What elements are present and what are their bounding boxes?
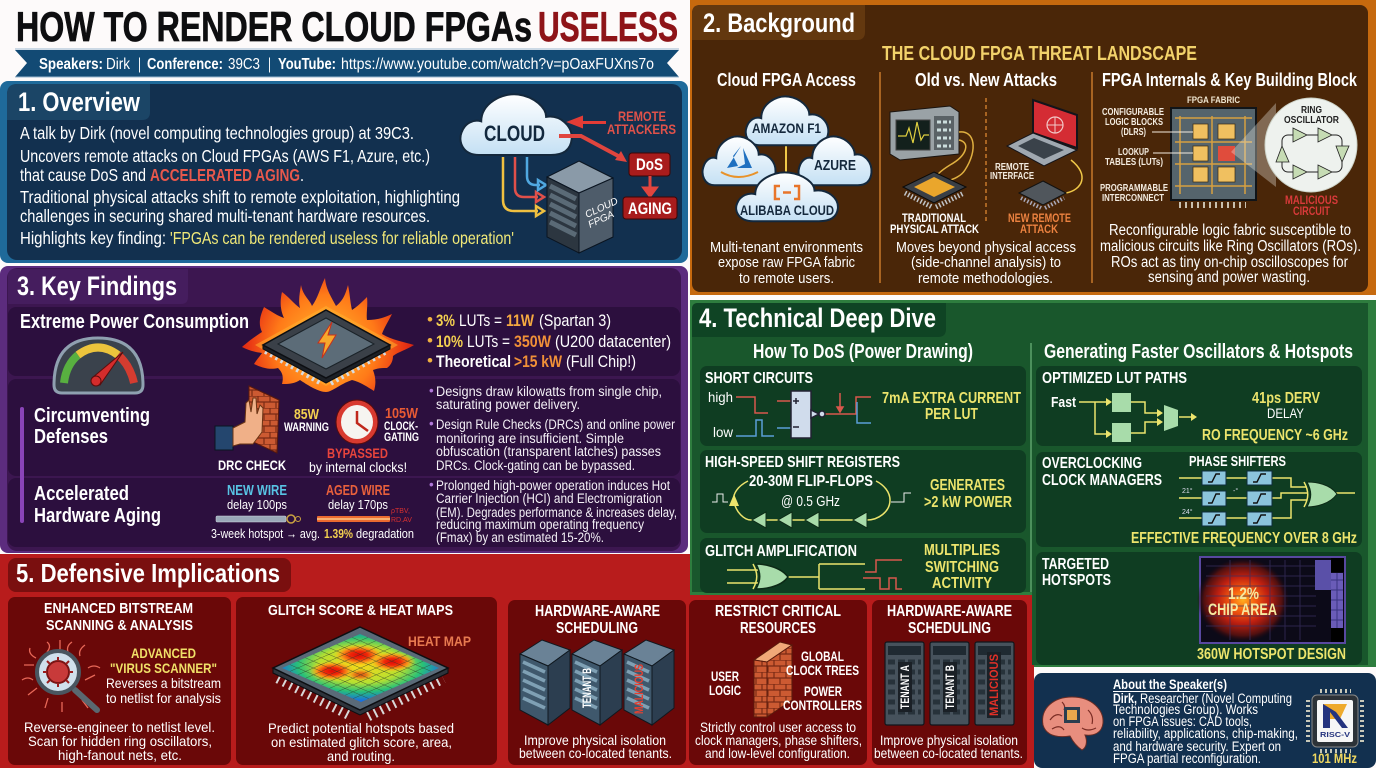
remote attackers label: ATTACKERS	[607, 121, 676, 137]
arrow head: DoS	[615, 151, 627, 162]
diagram: fpga fabric: FPGA FABRIC	[1187, 95, 1240, 106]
label: bypassed	[309, 445, 407, 475]
degradation note: 3-week hotspot → avg.	[211, 526, 320, 541]
degradation note	[211, 526, 414, 541]
card heading: HARDWARE-AWARE	[887, 603, 1012, 620]
callout: generates power: GENERATES	[930, 477, 1005, 494]
cloud: azure logo	[703, 136, 776, 185]
cloud: amazon f1: AMAZON F1	[752, 120, 821, 136]
speaker ribbon: |	[138, 56, 141, 73]
bullets: power stats: 11W	[506, 311, 535, 330]
cloud: alibaba: ALIBABA CLOUD	[740, 202, 834, 218]
labels: fabric parts: INTERCONNECT	[1102, 193, 1164, 204]
ring oscillator circle: RING	[1301, 105, 1322, 116]
card text: Reverse-engineer to netlist level.	[24, 719, 215, 735]
card heading	[44, 600, 193, 634]
text: old vs new	[896, 239, 1076, 287]
speaker bio	[1113, 676, 1298, 766]
label: protected resources: CONTROLLERS	[783, 697, 862, 713]
card heading: SCANNING & ANALYSIS	[46, 617, 193, 634]
heading: key findings: 3. Key Findings	[17, 271, 177, 301]
overview text: ACCELERATED AGING	[150, 165, 300, 185]
bullets: defenses: monitoring are insufficient. Simple	[436, 431, 624, 446]
icon: risc-v chip	[1308, 691, 1362, 751]
callout: extra current: 7mA EXTRA CURRENT	[882, 390, 1021, 407]
card heading: SCHEDULING	[908, 620, 991, 637]
heading: defensive implications: 5. Defensive Implications	[16, 558, 280, 588]
cloud: amazon f1	[746, 96, 828, 145]
ring oscillator circle: OSCILLATOR	[1284, 115, 1340, 126]
label: DRC check: DRC CHECK	[218, 457, 286, 473]
label: 105W clock-gating: GATING	[384, 430, 419, 444]
icon: racks: TENANT A	[898, 665, 912, 709]
card text	[24, 719, 215, 763]
speaker ribbon: Conference:	[147, 56, 223, 73]
panel: 3. key findings	[0, 266, 688, 553]
panel: about the speaker	[1034, 673, 1376, 768]
text: cloud fpga access: Multi-tenant environments	[710, 239, 863, 256]
label: protected resources: POWER	[804, 683, 842, 699]
label: remote interface: REMOTE	[995, 162, 1029, 173]
text: old vs new: (side-channel analysis) to	[911, 254, 1061, 271]
heading: background: 2. Background	[703, 8, 855, 38]
aged wire: ρTBV,	[391, 508, 410, 515]
speaker ribbon: Dirk	[106, 56, 131, 73]
input labels: high	[708, 389, 733, 405]
heading: overview	[7, 84, 150, 120]
speaker bio: reliability, applications, chip-making,	[1113, 726, 1298, 741]
label: user logic	[709, 668, 741, 698]
text: fpga internals: sensing and power wasting.	[1148, 269, 1310, 286]
callout: switching activity	[924, 542, 1000, 592]
bullets: power stats: Theoretical	[436, 352, 511, 371]
card: short circuits	[700, 366, 1026, 446]
speaker bio: Dirk,	[1113, 691, 1137, 706]
card text: between co-located tenants.	[874, 745, 1023, 761]
diagram: phase shifters: 24°	[1182, 508, 1193, 516]
speaker ribbon: https://www.youtube.com/watch?v=pOaxFUXns7o	[341, 56, 654, 73]
card heading	[1042, 556, 1111, 589]
bullets: defenses: obfuscation (transparent latches) passes	[436, 444, 661, 459]
callout: generates power: >2 kW POWER	[924, 494, 1012, 511]
icon: server group: TENANT B	[580, 668, 594, 708]
bullets: power stats: •	[427, 310, 433, 329]
subheading: circumventing defenses	[34, 405, 150, 448]
diagram: phase shifters: -°	[1233, 487, 1238, 495]
speaker ribbon: 39C3	[228, 56, 260, 73]
card: glitch amplification	[700, 538, 1026, 593]
diagram: cloud attacks	[460, 94, 677, 253]
arrow: remote link	[1066, 160, 1082, 193]
card: hardware-aware scheduling (right)	[872, 600, 1027, 765]
speaker ribbon: |	[268, 56, 271, 73]
icon: server group	[520, 640, 674, 725]
text: advanced virus scanner: ADVANCED	[131, 645, 196, 661]
card text: high-fanout nets, etc.	[58, 747, 182, 763]
diagram: phase shifters: 21°	[1182, 487, 1193, 495]
input labels: low	[713, 424, 734, 440]
bullets: aging: •	[429, 477, 434, 492]
card: shift registers: HIGH-SPEED SHIFT REGISTERS	[705, 454, 900, 471]
speaker bio: Technologies Group). Works	[1113, 702, 1258, 717]
bullets: aging: (Fmax) by an estimated 15-20%.	[436, 530, 604, 545]
label: clock speed: 101 MHz	[1312, 750, 1357, 766]
cloud: azure	[799, 136, 872, 185]
title: USELESS	[538, 3, 678, 50]
arrow: blue	[527, 157, 546, 190]
card heading: RESTRICT CRITICAL	[715, 603, 841, 620]
icon: gauge	[54, 338, 143, 393]
text: cloud fpga access: to remote users.	[739, 270, 834, 287]
card: hardware-aware scheduling (left)	[508, 600, 686, 765]
column headings	[753, 341, 1353, 363]
subheading: hardware aging: Hardware Aging	[34, 505, 161, 527]
diagram: flip-flop loop	[712, 481, 911, 528]
aged wire: AGED WIRE	[326, 482, 390, 499]
bullets: aging: Prolonged high-power operation induces Hot	[436, 478, 670, 493]
card heading: GLITCH SCORE & HEAT MAPS	[268, 602, 453, 619]
labels: fabric parts	[1100, 107, 1193, 204]
icon: magnifier virus	[22, 640, 100, 712]
overview text: that cause DoS and	[20, 165, 146, 185]
labels: fabric parts: TABLES (LUTs)	[1105, 157, 1163, 168]
label: protected resources: GLOBAL	[801, 648, 844, 664]
card: optimized lut paths: OPTIMIZED LUT PATHS	[1042, 370, 1187, 387]
degradation note: degradation	[356, 526, 414, 541]
speaker bio: FPGA partial reconfiguration.	[1113, 751, 1261, 766]
panel: 2. background	[690, 0, 1376, 295]
label: traditional physical attack	[890, 211, 979, 236]
threat landscape title: THE CLOUD FPGA THREAT LANDSCAPE	[882, 43, 1197, 65]
flip-flop labels: @ 0.5 GHz	[781, 493, 840, 510]
ring oscillator circle	[1265, 98, 1357, 192]
card: targeted hotspots	[1036, 552, 1362, 665]
bullets: power stats: (U200 datacenter)	[555, 332, 671, 351]
card heading: HOTSPOTS	[1042, 572, 1111, 589]
label: new remote attack: NEW REMOTE	[1008, 211, 1071, 225]
card text	[695, 719, 862, 761]
card heading: SCHEDULING	[556, 620, 638, 637]
label: 85W warning: 85W	[294, 406, 320, 423]
label: heat map: HEAT MAP	[408, 633, 471, 649]
column headings	[717, 70, 1358, 90]
label: 105W clock-gating: 105W	[385, 405, 419, 422]
subheading: hardware aging	[34, 483, 161, 527]
chip heat map	[1197, 557, 1345, 643]
bullets: power stats: >15 kW	[514, 352, 563, 371]
speaker bio: Researcher (Novel Computing	[1140, 691, 1292, 706]
aged wire: delay 170ps	[328, 497, 388, 512]
labels: fabric parts: LOGIC BLOCKS	[1105, 117, 1163, 128]
callout: ro frequency	[1202, 390, 1348, 444]
new wire: NEW WIRE	[227, 482, 287, 499]
icon: laptop	[1007, 100, 1077, 166]
overview text: challenges in securing shared multi-tenant hardware resources.	[20, 206, 430, 226]
card: restrict resources	[689, 600, 867, 765]
card text: Strictly control user access to	[700, 719, 856, 735]
label: traditional physical attack: PHYSICAL ATTACK	[890, 222, 979, 236]
column headings: How To DoS (Power Drawing)	[753, 341, 973, 363]
flip-flop labels: 20-30M FLIP-FLOPS	[749, 473, 873, 490]
bullets: aging: Carrier Injection (HCI) and Electromigration	[436, 491, 662, 506]
label: 105W clock-gating: CLOCK-	[384, 419, 418, 433]
subheading: extreme power: Extreme Power Consumption	[20, 311, 249, 333]
overview text: .	[300, 165, 304, 185]
callout: switching activity: MULTIPLIES	[924, 542, 1000, 559]
card text	[519, 732, 672, 761]
hotspot label	[1208, 584, 1277, 619]
label: traditional physical attack: TRADITIONAL	[902, 211, 966, 225]
hotspot label: CHIP AREA	[1208, 600, 1277, 619]
diagram: phase shifters	[1179, 471, 1355, 526]
icon: cloud: CLOUD	[484, 121, 545, 146]
label: malicious circuit	[1285, 193, 1338, 218]
icon: probed chip	[903, 172, 966, 207]
bullets: power stats: 350W	[514, 332, 552, 351]
card text: Improve physical isolation	[524, 732, 666, 748]
card text	[874, 732, 1023, 761]
label: new remote attack	[1008, 211, 1071, 236]
labels: fabric parts: (DLRS)	[1121, 127, 1146, 138]
icon: remote chip	[1019, 181, 1066, 208]
card: overclocking	[1036, 452, 1362, 547]
icon: cloud fpga server: CLOUD	[584, 196, 620, 221]
bullets: aging: (EM). Degrades performance & increases delay,	[436, 505, 677, 520]
arrow: cloud to DoS	[559, 136, 622, 158]
speaker bio: and hardware security. Expert on	[1113, 739, 1281, 754]
card: optimized lut paths	[1036, 366, 1362, 446]
arrow: attackers to cloud	[569, 117, 605, 127]
card: glitch amplification: GLITCH AMPLIFICATION	[705, 543, 857, 560]
overview text: Uncovers remote attacks on Cloud FPGAs (AWS F1, Azure, etc.)	[20, 146, 430, 166]
bullets: defenses: Design Rule Checks (DRCs) and online power	[436, 417, 675, 432]
bullets: power stats: LUTs =	[459, 311, 502, 330]
card heading: ENHANCED BITSTREAM	[44, 600, 193, 617]
overview text: Traditional physical attacks shift to remote exploitation, highlighting	[20, 187, 460, 207]
bullets: power stats	[427, 310, 671, 371]
DoS box	[629, 153, 670, 176]
text: advanced virus scanner: "VIRUS SCANNER"	[110, 660, 217, 676]
labels: fabric parts: PROGRAMMABLE	[1100, 183, 1168, 194]
card heading	[535, 603, 660, 637]
panel: 4. technical deep dive	[690, 300, 1376, 667]
icon: cloud	[460, 94, 572, 155]
DoS box: DoS	[636, 155, 663, 174]
bullets: defenses: •	[429, 383, 434, 398]
icon: server group: MALICIOUS	[632, 664, 646, 714]
text: advanced virus scanner: to netlist for analysis	[106, 690, 221, 706]
bullets: power stats: LUTs =	[467, 332, 510, 351]
icon: DRC wall and hand	[215, 386, 279, 453]
text: old vs new: Moves beyond physical access	[896, 239, 1076, 256]
label: protected resources	[783, 648, 862, 713]
panel: 1. overview	[0, 81, 688, 263]
card text: Improve physical isolation	[880, 732, 1018, 748]
subheading: hardware aging: Accelerated	[34, 483, 129, 505]
card heading: OVERCLOCKING	[1042, 455, 1142, 472]
card text: clock managers, phase shifters,	[695, 732, 862, 748]
bullets: defenses: saturating power delivery.	[436, 397, 580, 412]
label: malicious circuit: MALICIOUS	[1285, 193, 1338, 207]
card text: and routing.	[327, 748, 395, 764]
callout: switching activity: SWITCHING	[925, 559, 999, 576]
bullets: power stats: 10%	[436, 332, 463, 351]
bullets: defenses: •	[429, 416, 434, 431]
column headings: Cloud FPGA Access	[717, 70, 856, 90]
fast label: Fast	[1051, 394, 1076, 411]
bullets: power stats: (Full Chip!)	[566, 352, 636, 371]
card heading: HARDWARE-AWARE	[535, 603, 660, 620]
text: advanced virus scanner	[106, 645, 221, 706]
bullets: power stats: •	[427, 331, 433, 350]
label: remote interface	[990, 162, 1034, 182]
aging box: AGING	[628, 199, 672, 218]
card text	[268, 720, 454, 764]
icon: cloud fpga server	[547, 161, 620, 253]
callout: extra current: PER LUT	[925, 406, 978, 423]
overview text: Highlights key finding:	[20, 228, 166, 248]
card text: between co-located tenants.	[519, 745, 672, 761]
label: phase shifters: PHASE SHIFTERS	[1189, 453, 1286, 470]
label: user logic: USER	[711, 668, 739, 684]
callout: switching activity: ACTIVITY	[932, 575, 992, 592]
labels: fabric parts: CONFIGURABLE	[1102, 107, 1164, 118]
overview text	[20, 123, 514, 248]
text: old vs new: remote methodologies.	[918, 270, 1053, 287]
icon: racks: MALICIOUS	[987, 654, 1001, 716]
subheading: circumventing defenses: Defenses	[34, 426, 108, 448]
diagram: lut paths	[1079, 393, 1197, 442]
diagram: short circuit gate	[736, 391, 871, 438]
label: 85W warning	[284, 406, 329, 434]
subheading: circumventing defenses: Circumventing	[34, 405, 150, 427]
heading: overview: 1. Overview	[18, 87, 141, 117]
bullets: power stats: •	[427, 351, 433, 370]
speaker bio: on FPGA issues: CAD tools,	[1113, 714, 1252, 729]
icon: brick wall	[754, 642, 792, 717]
row backgrounds	[8, 307, 680, 547]
zoom cone	[1231, 103, 1276, 187]
card text: and low-level configuration.	[705, 745, 850, 761]
card heading	[715, 603, 841, 637]
bullets: defenses: Designs draw kilowatts from single chip,	[436, 384, 662, 399]
accent bar	[20, 407, 24, 523]
arrow: DoS to aging	[644, 176, 656, 196]
new wire: delay 100ps	[227, 497, 287, 512]
aged wire: RD.AV	[391, 517, 412, 524]
card text: Scan for hidden ring oscillators,	[28, 733, 212, 749]
card: bitstream scanning	[8, 597, 231, 765]
diagram: cloud providers	[703, 96, 872, 221]
speaker ribbon: YouTube:	[278, 56, 336, 73]
bullets: aging: reducing maximum operating frequency	[436, 517, 644, 532]
text: fpga internals	[1100, 222, 1361, 286]
label: remote interface: INTERFACE	[990, 171, 1034, 182]
card heading: TARGETED	[1042, 556, 1109, 573]
remote attackers label	[607, 108, 676, 137]
diagram: fpga fabric	[1171, 95, 1256, 205]
remote attackers label: REMOTE	[618, 108, 666, 124]
card text: on estimated glitch score, area,	[271, 734, 452, 750]
cloud: alibaba	[736, 172, 838, 221]
label: bypassed: BYPASSED	[327, 445, 388, 461]
speaker ribbon: Speakers:	[39, 56, 103, 73]
new wire	[216, 482, 300, 523]
callout: extra current	[882, 390, 1021, 423]
text: advanced virus scanner: Reverses a bitstream	[106, 675, 221, 691]
flip-flop labels	[749, 473, 873, 510]
column headings: Old vs. New Attacks	[915, 70, 1057, 90]
icon: cloud fpga server: FPGA	[587, 209, 616, 231]
heading: deep dive: 4. Technical Deep Dive	[699, 303, 936, 333]
label: 85W warning: WARNING	[284, 420, 329, 434]
card heading: CLOCK MANAGERS	[1042, 472, 1162, 489]
panel: 5. defensive implications	[0, 554, 1034, 768]
card: short circuits: SHORT CIRCUITS	[705, 370, 813, 387]
callout: ro frequency: 41ps DERV	[1252, 390, 1320, 407]
text: cloud fpga access: expose raw FPGA fabric	[718, 254, 855, 271]
card text: Predict potential hotspots based	[268, 720, 454, 736]
label: 105W clock-gating	[384, 405, 419, 444]
card heading	[887, 603, 1012, 637]
title: HOW TO RENDER CLOUD FPGAs	[16, 3, 532, 50]
input labels	[708, 389, 734, 440]
icon: brain	[1043, 697, 1103, 750]
icon: oscilloscope	[890, 106, 959, 160]
label: malicious circuit: CIRCUIT	[1293, 204, 1331, 218]
callout: ro frequency: DELAY	[1267, 405, 1305, 421]
degradation note: 1.39%	[324, 526, 353, 541]
label: bypassed: by internal clocks!	[309, 459, 407, 475]
diagram: glitch xor	[727, 560, 902, 589]
speaker bio: About the Speaker(s)	[1113, 676, 1227, 692]
bullets: aging	[429, 477, 677, 545]
arrow: red	[515, 157, 544, 202]
text: cloud fpga access	[710, 239, 863, 287]
card: shift registers	[700, 450, 1026, 533]
label: new remote attack: ATTACK	[1020, 222, 1058, 236]
icon: racks	[885, 642, 1014, 725]
card heading: RESOURCES	[740, 620, 816, 637]
label: protected resources: CLOCK TREES	[786, 662, 859, 678]
labels: fabric parts: LOOKUP	[1118, 147, 1149, 158]
icon: racks: TENANT B	[943, 665, 957, 709]
cloud: azure: AZURE	[814, 157, 856, 174]
icon: risc-v chip: RISC-V	[1320, 732, 1350, 739]
probes	[932, 132, 973, 184]
hotspot label: 1.2%	[1228, 584, 1259, 603]
icon: heat map chip	[273, 627, 448, 716]
icon: clock	[336, 400, 378, 444]
card heading	[1042, 455, 1162, 489]
bullets: power stats: 3%	[436, 311, 455, 330]
speaker ribbon	[15, 49, 679, 77]
aged wire	[317, 482, 412, 524]
overview text: A talk by Dirk (novel computing technologies group) at 39C3.	[20, 123, 414, 143]
arrow: yellow	[503, 157, 544, 216]
bullets: defenses	[429, 383, 675, 473]
card: glitch score	[236, 597, 497, 765]
overview text: 'FPGAs can be rendered useless for reliable operation'	[170, 228, 514, 248]
label: user logic: LOGIC	[709, 682, 741, 698]
bullets: power stats: (Spartan 3)	[539, 311, 611, 330]
icon: burning chip	[242, 278, 414, 392]
bullets: defenses: DRCs. Clock-gating can be bypassed.	[436, 458, 635, 473]
callout: generates power	[924, 477, 1012, 511]
